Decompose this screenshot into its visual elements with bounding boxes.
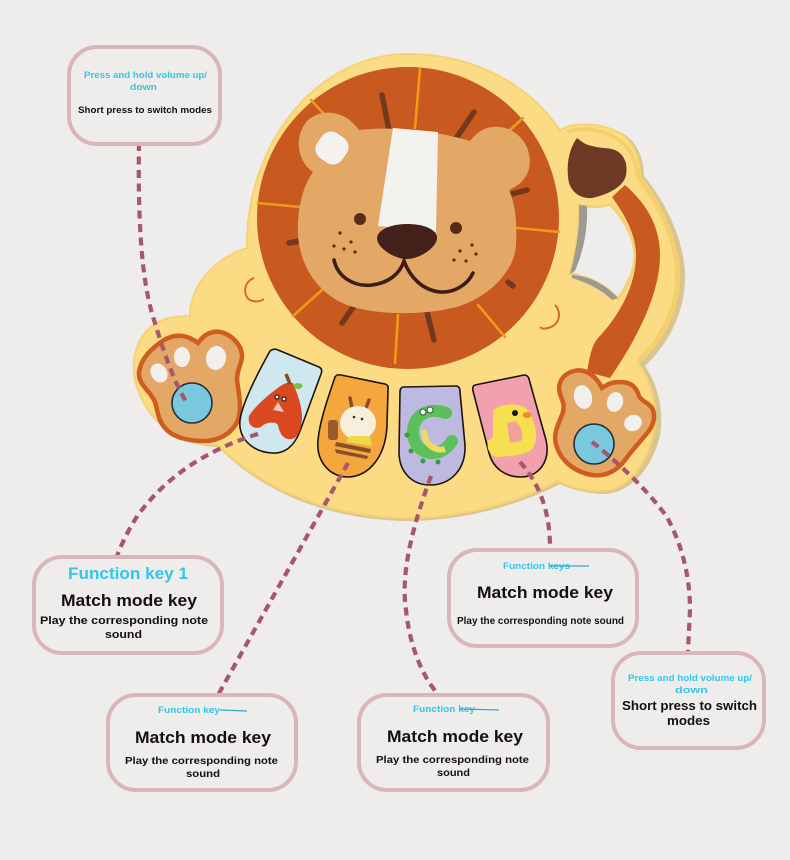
right paw toes xyxy=(571,383,645,434)
connector line: right button xyxy=(592,442,690,651)
key A xyxy=(240,349,322,453)
left paw button xyxy=(172,383,212,423)
callout: right volume: down xyxy=(675,685,708,696)
callout: function key B: Match mode key xyxy=(135,728,272,747)
connector line: key C xyxy=(405,476,438,694)
right paw xyxy=(555,370,654,475)
lion face xyxy=(298,113,530,313)
callout: right volume: Short press to switch xyxy=(622,698,757,713)
bunny figure xyxy=(350,398,352,408)
callout: top left volume: down xyxy=(130,82,157,92)
toy: lion piano xyxy=(134,54,685,521)
tail hole xyxy=(570,204,635,299)
letter A apple xyxy=(249,383,302,439)
callout: function key 1: Match mode key xyxy=(61,591,198,610)
callout: function key 1: sound xyxy=(105,629,142,641)
callout: function key C: Function key xyxy=(413,704,476,715)
callout: function key 1: Function key 1 xyxy=(68,564,188,583)
eyes xyxy=(354,213,462,234)
nose xyxy=(377,224,437,259)
right paw button xyxy=(574,424,614,464)
callout: right volume xyxy=(613,653,764,748)
lion head mane xyxy=(257,67,559,369)
tail tip xyxy=(568,138,627,198)
callout: top left volume: Short press to switch modes xyxy=(78,105,212,116)
key B xyxy=(318,375,388,477)
callout: function key B: Function key xyxy=(158,705,221,716)
left paw xyxy=(139,332,242,441)
callout: function key C: Play the corresponding note xyxy=(376,754,529,766)
tail rim xyxy=(568,129,677,360)
key D xyxy=(473,375,547,477)
callout: function key D: Function keys xyxy=(503,561,570,572)
callout: function key D xyxy=(449,550,637,646)
body curls xyxy=(245,278,264,301)
tail hole inner wall xyxy=(570,205,618,300)
callout: function key B: sound xyxy=(186,768,220,780)
toy body xyxy=(134,54,679,518)
duck letter D xyxy=(487,404,536,457)
connector line: key D xyxy=(520,462,550,548)
ear spot xyxy=(311,127,353,169)
tail xyxy=(587,185,660,378)
callout: function key B xyxy=(108,695,296,790)
callout: function key D: Match mode key xyxy=(477,583,614,602)
callout: function key D: Play the corresponding note sound xyxy=(457,616,624,627)
mane orange lines xyxy=(258,69,559,363)
connector line: key A xyxy=(117,434,258,556)
mouth xyxy=(334,260,473,292)
callout: right volume: modes xyxy=(667,713,710,728)
key C xyxy=(399,386,465,485)
crocodile letter C xyxy=(413,411,452,453)
whisker dots xyxy=(332,231,478,263)
callout: function key C: Match mode key xyxy=(387,727,524,746)
connector line: key B xyxy=(218,463,348,695)
toy body shadow edge xyxy=(135,55,685,521)
left paw toes xyxy=(147,344,228,386)
callout: function key C xyxy=(359,695,548,790)
forehead stripe xyxy=(378,128,438,232)
callout: right volume: Press and hold volume up/ xyxy=(628,673,752,684)
mane dark lines xyxy=(289,95,527,340)
callout: function key B: Play the corresponding note xyxy=(125,755,278,767)
callout: function key C: sound xyxy=(437,767,470,779)
callout: function key 1 xyxy=(34,557,222,653)
callout: function key 1: Play the corresponding note xyxy=(40,615,208,627)
connector line: left button xyxy=(139,143,187,403)
callout: top left volume xyxy=(69,47,220,144)
callout: top left volume: Press and hold volume up/ xyxy=(84,70,208,80)
